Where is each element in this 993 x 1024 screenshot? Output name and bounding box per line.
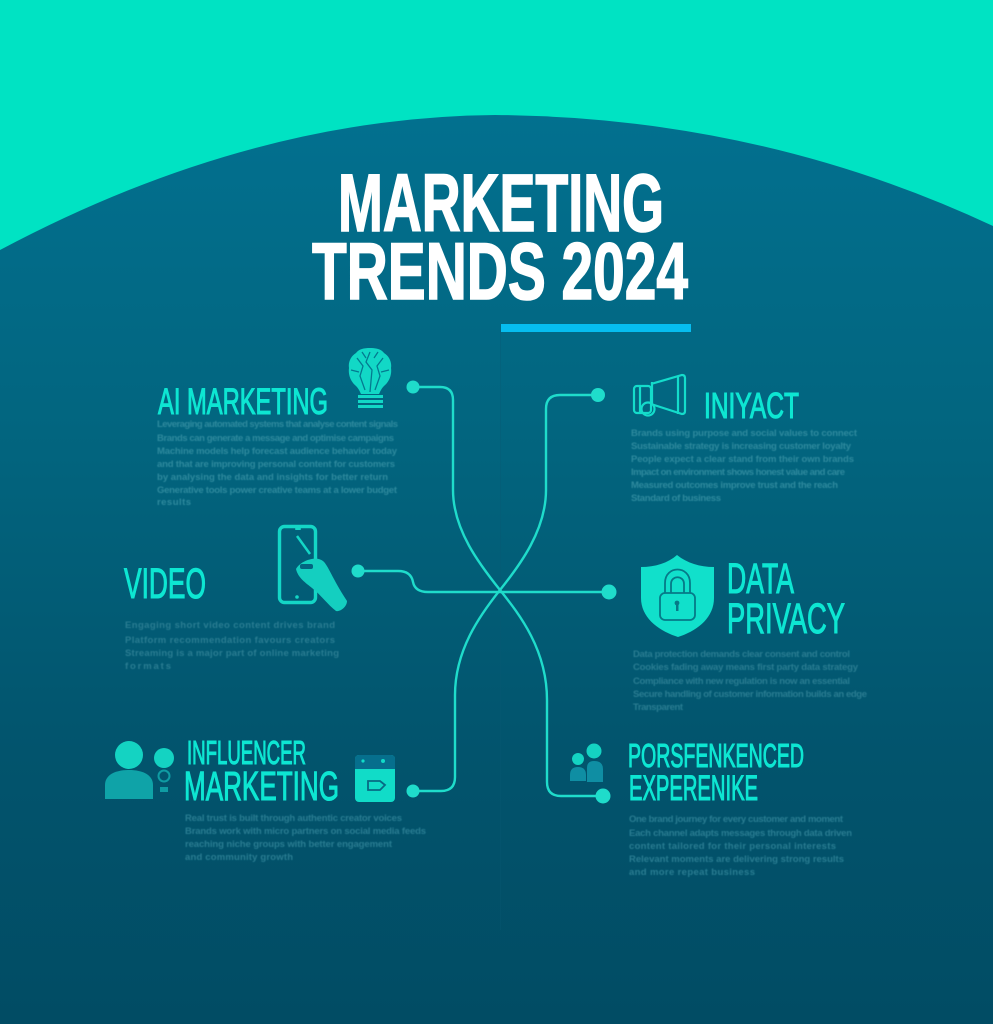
icon: shield with padlock: [641, 555, 714, 637]
title: MARKETING: [338, 158, 664, 249]
body text: AI marketing: results: [157, 497, 191, 508]
heading: influencer marketing: [184, 734, 339, 809]
body text: personalized experience: content tailored for their personal interests: [629, 841, 836, 852]
body text: impact: Brands using purpose and social values to connect: [631, 428, 858, 439]
body text: personalized experience: Each channel adapts messages through data driven: [629, 828, 852, 839]
body text: personalized experience: and more repeat business: [629, 867, 755, 878]
panel: impact: [631, 375, 858, 504]
body text: data privacy: Compliance with new regulation is now an essential: [633, 676, 850, 687]
body text: data privacy: Transparent: [633, 702, 684, 713]
body text: impact: Impact on environment shows honest value and care: [631, 467, 845, 478]
body text: video: [125, 620, 339, 672]
body text: impact: Standard of business: [631, 493, 721, 504]
heading: personalized experience: PORSFENKENCED: [628, 737, 804, 774]
heading: data privacy: [727, 555, 845, 643]
body text: personalized experience: [629, 814, 852, 878]
body text: video: Engaging short video content drives brand: [125, 620, 335, 631]
body text: personalized experience: Relevant moments are delivering strong results: [629, 854, 844, 865]
icon: users: [570, 744, 603, 782]
body text: personalized experience: One brand journey for every customer and moment: [629, 814, 844, 825]
heading: data privacy: PRIVACY: [727, 595, 845, 643]
body text: impact: Measured outcomes improve trust and the reach: [631, 480, 838, 491]
panel: personalized experience: [570, 737, 852, 878]
heading: influencer marketing: MARKETING: [184, 763, 339, 809]
body text: AI marketing: [157, 419, 398, 508]
heading: personalized experience: EXPERENIKE: [629, 769, 758, 808]
body text: video: Platform recommendation favours creators: [125, 635, 335, 646]
body text: AI marketing: Generative tools power creative teams at a lower budget: [157, 485, 398, 496]
body text: data privacy: Cookies fading away means first party data strategy: [633, 662, 859, 673]
body text: AI marketing: Brands can generate a message and optimise campaigns: [157, 433, 394, 444]
heading: data privacy: DATA: [727, 555, 794, 603]
body text: AI marketing: Machine models help forecast audience behavior today: [157, 446, 398, 457]
heading: impact: INIYACT: [704, 385, 799, 426]
body text: video: formats: [125, 661, 171, 672]
title accent bar: [501, 324, 691, 332]
title: TRENDS 2024: [312, 227, 688, 317]
panel: data privacy: [633, 555, 867, 713]
title: [312, 158, 688, 317]
icon: megaphone: [634, 375, 685, 416]
heading: influencer marketing: INFLUENCER: [187, 734, 306, 771]
body text: influencer marketing: Real trust is built through authentic creator voices: [185, 813, 402, 824]
heading: personalized experience: [628, 737, 804, 808]
icon: phone with hand: [280, 526, 347, 611]
heading: AI marketing: AI MARKETING: [158, 381, 328, 422]
panel: influencer marketing: [105, 734, 426, 863]
body text: impact: Sustainable strategy is increasing customer loyalty: [631, 441, 852, 452]
body text: data privacy: Secure handling of customer information builds an edge: [633, 689, 867, 700]
connector lines: [352, 380, 616, 804]
body text: AI marketing: by analysing the data and insights for better return: [157, 472, 388, 483]
body text: AI marketing: and that are improving personal content for customers: [157, 459, 395, 470]
body text: influencer marketing: Brands work with micro partners on social media feeds: [185, 826, 426, 837]
body text: influencer marketing: and community growth: [185, 852, 293, 863]
body text: video: Streaming is a major part of online marketing: [125, 648, 339, 659]
panel: AI marketing: [157, 348, 398, 508]
body text: AI marketing: Leveraging automated systems that analyse content signals: [157, 419, 398, 430]
body text: impact: People expect a clear stand from their own brands: [631, 454, 854, 465]
body text: data privacy: [633, 649, 867, 713]
body text: influencer marketing: [185, 813, 426, 863]
body text: impact: [631, 428, 858, 504]
icon: brain lightbulb: [349, 348, 391, 408]
center divider shading: [500, 330, 501, 930]
panel: video: [124, 526, 347, 672]
body text: data privacy: Data protection demands clear consent and control: [633, 649, 850, 660]
icon: influencer people: [105, 741, 174, 799]
icon: calendar card: [355, 755, 395, 802]
heading: video: VIDEO: [124, 560, 206, 608]
body text: influencer marketing: reaching niche groups with better engagement: [185, 839, 393, 850]
